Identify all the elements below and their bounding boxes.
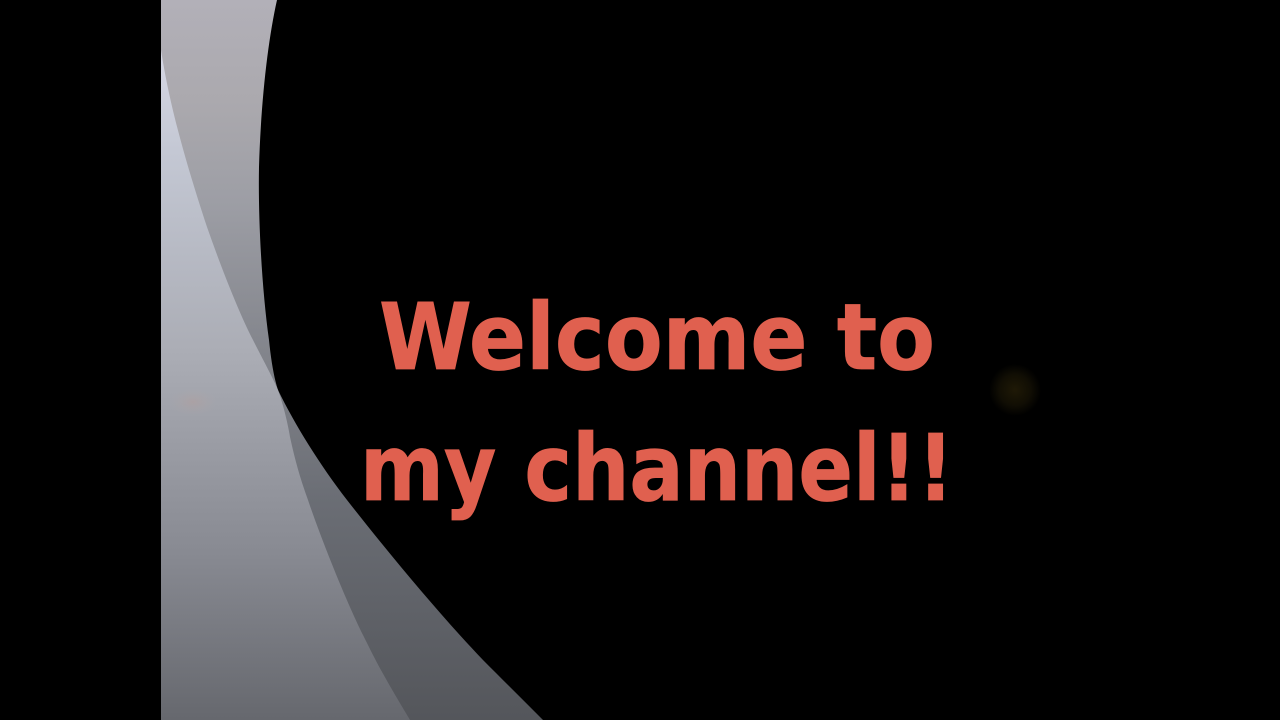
faint warm spot on swoosh bbox=[169, 388, 217, 416]
title bbox=[360, 284, 954, 522]
title line 2: my channel!! bbox=[360, 415, 954, 522]
back curved swoosh bbox=[161, 0, 543, 720]
front curved swoosh bbox=[161, 50, 410, 720]
title line 1: Welcome to bbox=[379, 284, 935, 391]
faint golden glow bbox=[989, 364, 1041, 416]
